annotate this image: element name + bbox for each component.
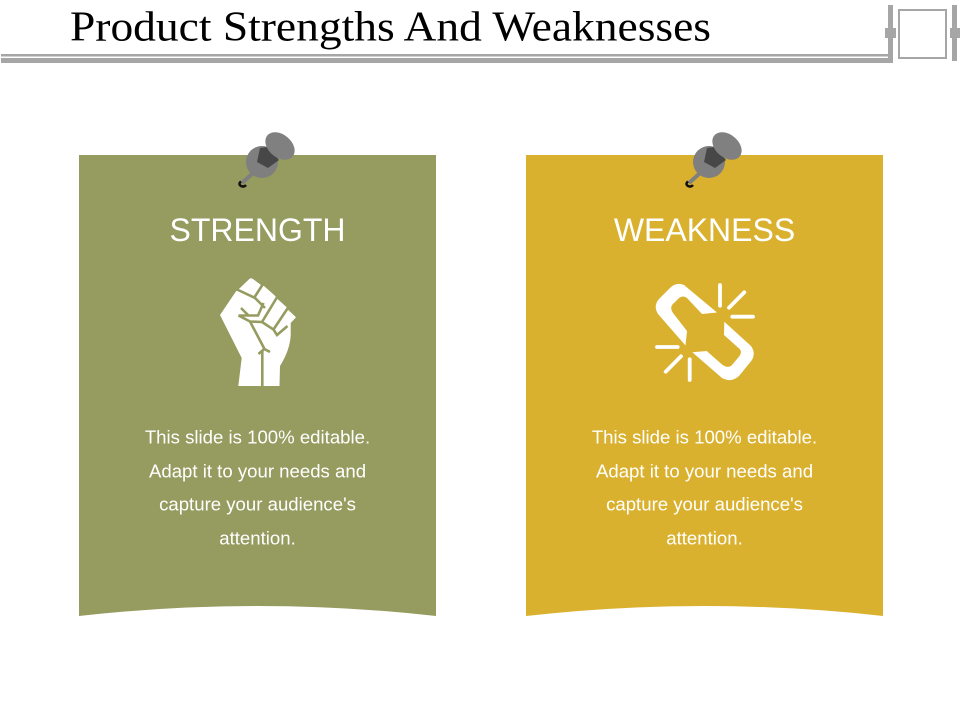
weakness body text: Adapt it to your needs and	[596, 460, 813, 482]
strength body text: attention.	[219, 528, 296, 548]
strength heading: STRENGTH	[170, 212, 346, 248]
weakness body text: This slide is 100% editable.	[592, 426, 817, 448]
title: Product Strengths And Weaknesses	[70, 4, 711, 50]
strength body text: Adapt it to your needs and	[149, 460, 366, 482]
weakness card background	[526, 155, 883, 616]
strength body text: This slide is 100% editable.	[145, 426, 370, 448]
weakness body text	[592, 426, 817, 548]
icon: strength push pin	[240, 127, 300, 187]
strength card background	[79, 155, 436, 616]
weakness body text: capture your audience's	[606, 494, 803, 514]
header frame	[1, 5, 960, 63]
weakness heading: WEAKNESS	[614, 212, 795, 248]
icon: weakness push pin	[686, 127, 747, 187]
panel: strength	[79, 127, 436, 616]
strength body text	[145, 426, 370, 548]
icon: raised fist	[220, 278, 296, 386]
weakness body text: attention.	[666, 528, 743, 548]
icon: broken chain link	[656, 284, 754, 380]
strength body text: capture your audience's	[159, 494, 356, 514]
panel: weakness	[526, 127, 883, 616]
